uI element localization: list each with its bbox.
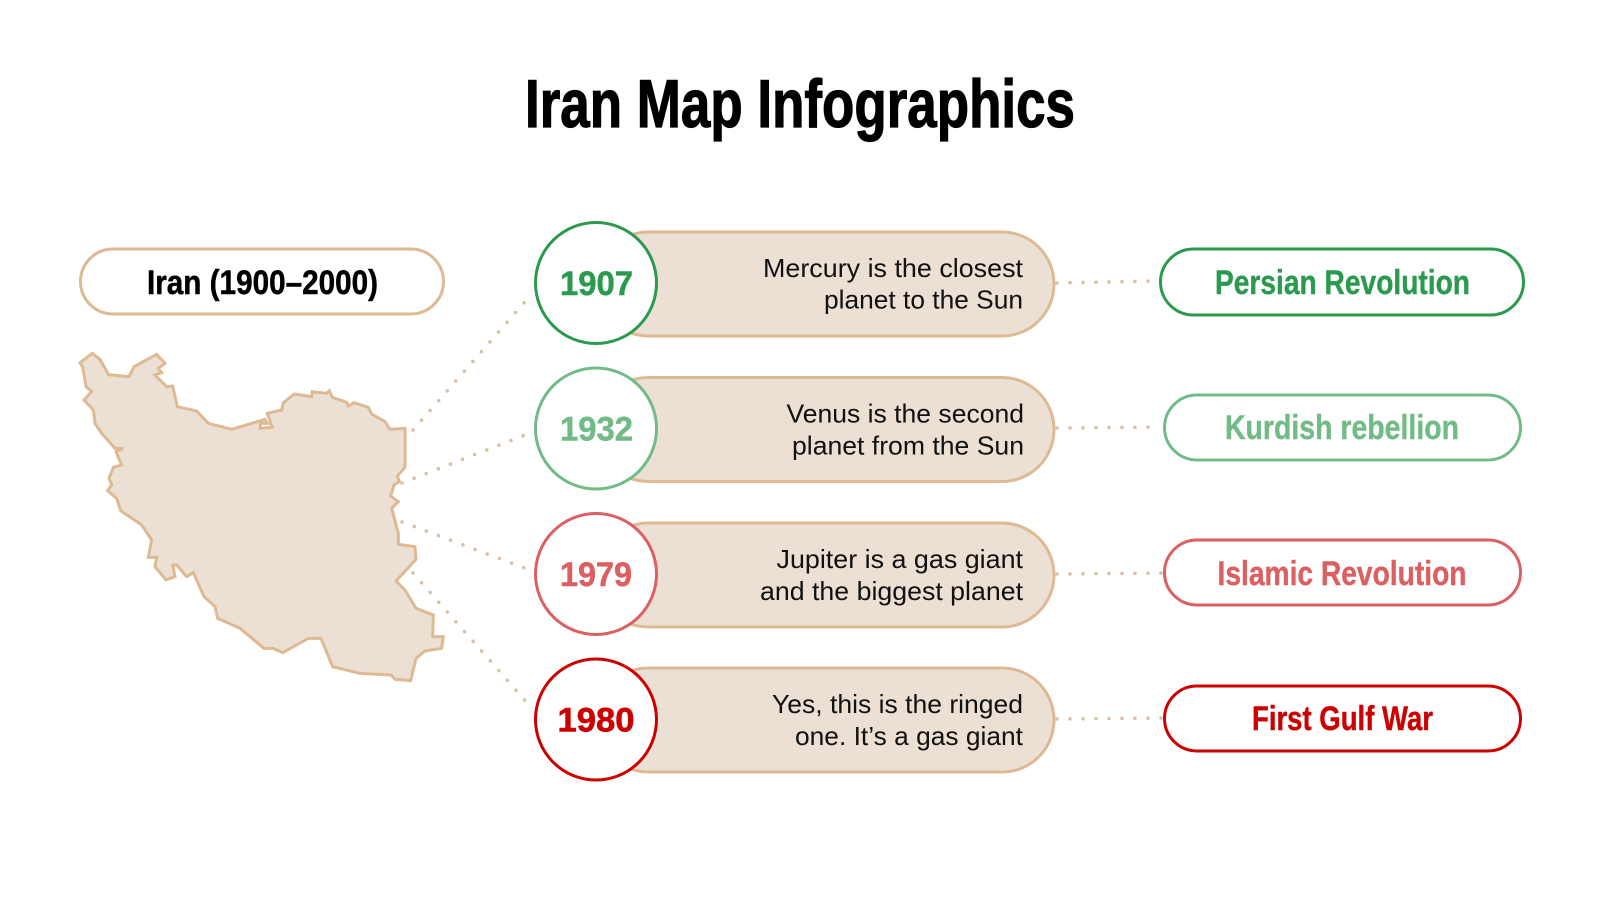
connector 1980: [1057, 718, 1163, 719]
description 1932: planet from the Sun: [792, 430, 1024, 460]
connector 1907: [1057, 281, 1155, 283]
year 1980: 1980: [558, 702, 634, 740]
row: 1907: [536, 222, 1524, 344]
event: First Gulf War: First Gulf War: [1252, 700, 1433, 738]
panel: Iran label pill: [80, 249, 444, 314]
connector 1932: [1057, 427, 1160, 428]
row: 1979: [536, 514, 1520, 634]
event pill: Persian Revolution: [1160, 249, 1524, 315]
description 1932: Venus is the second: [786, 398, 1024, 428]
event: Islamic Revolution: Islamic Revolution: [1218, 555, 1466, 593]
event: Kurdish rebellion: Kurdish rebellion: [1225, 409, 1459, 447]
year circle 1907: [536, 222, 656, 344]
panel: Iran label pill: Iran (1900–2000): [147, 264, 378, 302]
map: Iran silhouette: [80, 353, 443, 681]
row: 1980: [536, 659, 1520, 780]
description band 1979: [596, 523, 1054, 627]
description 1979: Jupiter is a gas giant: [776, 544, 1024, 574]
row: 1932: [536, 368, 1520, 489]
description 1979: and the biggest planet: [760, 576, 1024, 606]
description band 1907: [596, 232, 1054, 336]
event: Persian Revolution: Persian Revolution: [1215, 264, 1470, 302]
event pill: Islamic Revolution: [1164, 540, 1520, 605]
description 1980: one. It’s a gas giant: [795, 721, 1024, 751]
connector 1979: [1057, 573, 1163, 574]
year circle 1980: [536, 659, 656, 780]
description 1980: Yes, this is the ringed: [772, 689, 1023, 719]
year circle 1979: [536, 514, 656, 634]
year circle 1932: [536, 368, 656, 489]
connectors: map to year circles: [402, 296, 530, 706]
event pill: First Gulf War: [1164, 686, 1520, 751]
year 1979: 1979: [560, 556, 632, 594]
year 1932: 1932: [560, 410, 633, 448]
description band 1932: [596, 378, 1054, 482]
description 1907: planet to the Sun: [824, 284, 1023, 314]
year 1907: 1907: [560, 265, 633, 303]
event pill: Kurdish rebellion: [1164, 395, 1520, 460]
title: Iran Map Infographics: [525, 66, 1075, 142]
description 1907: Mercury is the closest: [763, 253, 1024, 283]
description band 1980: [596, 668, 1054, 772]
